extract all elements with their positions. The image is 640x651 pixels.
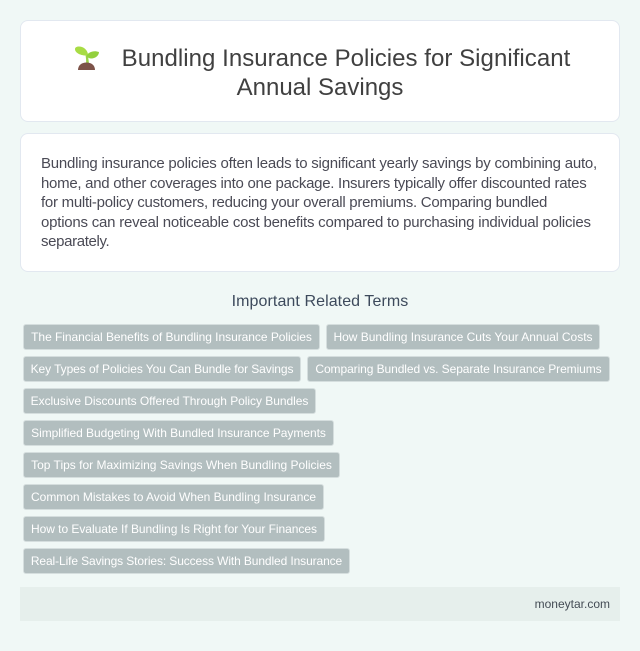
text: How Bundling Insurance Cuts Your Annual Costs bbox=[333, 330, 593, 344]
text: Real-Life Savings Stories: Success With Bundled Insurance bbox=[31, 554, 342, 568]
text: Comparing Bundled vs. Separate Insurance Premiums bbox=[315, 362, 602, 376]
text: Top Tips for Maximizing Savings When Bundling Policies bbox=[31, 458, 332, 472]
tag list bbox=[23, 324, 610, 574]
text: home, and other coverages into one package. Insurers typically offer discounted rates bbox=[41, 175, 586, 192]
text: Exclusive Discounts Offered Through Policy Bundles bbox=[31, 394, 308, 408]
footer bar bbox=[20, 587, 620, 621]
text: for multi-policy customers, reducing your overall premiums. Comparing bundled bbox=[41, 194, 547, 211]
panel: intro text card bbox=[20, 133, 620, 272]
text: Annual Savings bbox=[237, 74, 403, 101]
text: How to Evaluate If Bundling Is Right for Your Finances bbox=[31, 522, 317, 536]
text: The Financial Benefits of Bundling Insurance Policies bbox=[31, 330, 312, 344]
text: Key Types of Policies You Can Bundle for Savings bbox=[31, 362, 293, 376]
text: Bundling insurance policies often leads to significant yearly savings by combining auto, bbox=[41, 155, 597, 172]
footer site name: moneytar.com bbox=[535, 597, 610, 611]
text: options can reveal noticeable cost benefits compared to purchasing individual policies bbox=[41, 214, 591, 231]
text: separately. bbox=[41, 233, 109, 250]
text: Bundling Insurance Policies for Significant bbox=[122, 45, 570, 72]
icon: seedling bbox=[75, 46, 99, 70]
intro paragraph bbox=[41, 155, 597, 250]
text: Common Mistakes to Avoid When Bundling Insurance bbox=[31, 490, 316, 504]
text: Simplified Budgeting With Bundled Insurance Payments bbox=[31, 426, 326, 440]
heading: related terms: Important Related Terms bbox=[232, 293, 408, 310]
panel: title card bbox=[20, 20, 620, 122]
title bbox=[122, 45, 570, 101]
